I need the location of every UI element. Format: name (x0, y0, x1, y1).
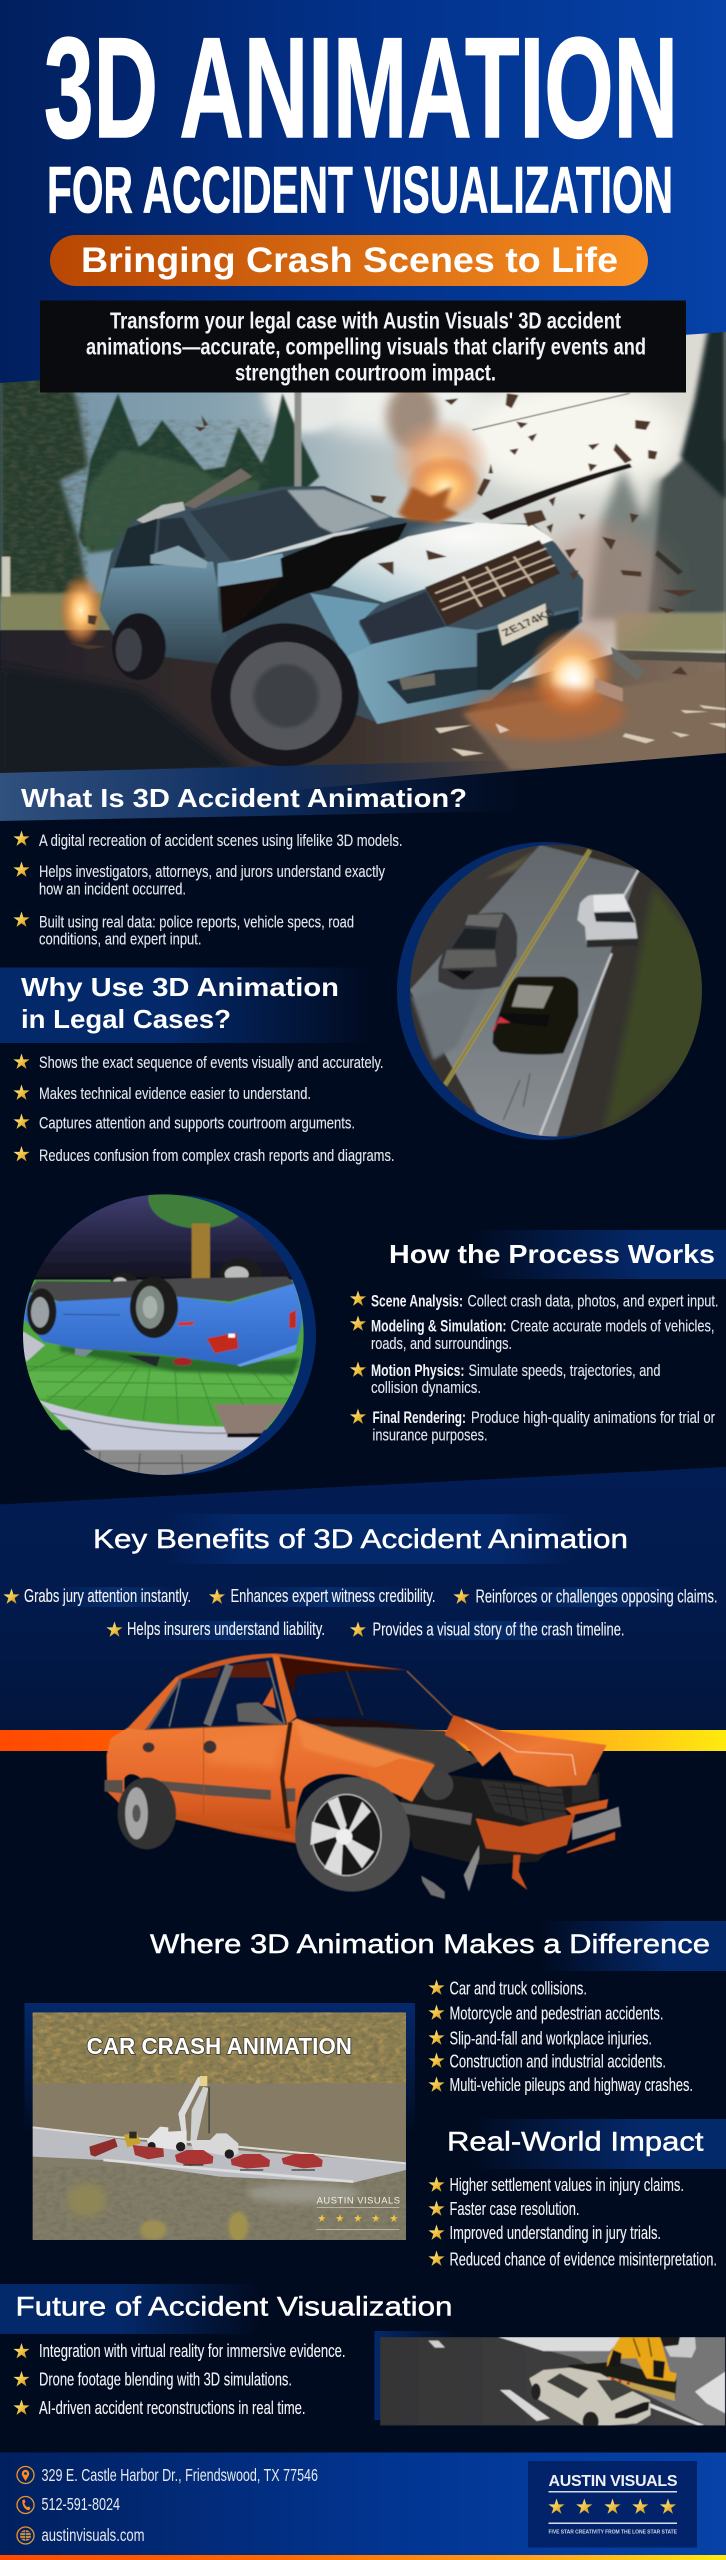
footer panel (0, 2452, 726, 2560)
step: modeling and simulation (350, 1316, 714, 1353)
front wheels (27, 1288, 56, 1335)
3D overturned car circle (10, 1168, 330, 1480)
fallen debris (421, 1876, 445, 1899)
forklift (607, 2337, 677, 2382)
contact: address: 329 E. Castle Harbor Dr., Friendswood, TX 77546 (42, 2465, 318, 2485)
intro text box (40, 300, 686, 392)
bullet: built using real data: conditions, and expert input. (39, 930, 202, 948)
white car (577, 894, 638, 947)
panel: why use 3D animation (0, 968, 394, 1165)
footer gradient strip (0, 2555, 726, 2560)
boom truck (178, 2077, 203, 2133)
headlight (359, 592, 445, 644)
bullet: captures attention: Captures attention and supports courtroom arguments. (39, 1114, 355, 1132)
flatbed (568, 2362, 677, 2400)
road (0, 630, 726, 793)
benefit: insurers (106, 1619, 325, 1639)
step: final rendering: Final Rendering: (372, 1408, 466, 1427)
body (107, 1718, 434, 1843)
wrecked orange car (104, 1653, 621, 1899)
contact: phone (17, 2494, 120, 2514)
bullet: helps investigators: Helps investigators, attorneys, and jurors understand exactly (39, 862, 385, 881)
panel: what is 3D accident animation (0, 760, 520, 948)
hero crash illustration (0, 327, 726, 793)
heading line two: in Legal Cases? (21, 1004, 231, 1034)
black car (493, 977, 578, 1055)
curb (38, 1400, 263, 1462)
heading: real-world impact: Real-World Impact (447, 2126, 704, 2156)
step: motion physics: Simulate speeds, trajectories, and (468, 1361, 660, 1380)
heading: key benefits: Key Benefits of 3D Accident Animation (93, 1524, 628, 1554)
heading: where: Where 3D Animation Makes a Difference (150, 1929, 710, 1959)
fender (310, 593, 380, 657)
contact: website: austinvisuals.com (42, 2525, 144, 2545)
benefit: crash timeline (350, 1620, 624, 1640)
bullet: technical evidence: Makes technical evidence easier to understand. (39, 1084, 311, 1103)
bullet: drone footage (13, 2370, 292, 2390)
step: modeling and simulation: roads, and surroundings. (371, 1334, 512, 1353)
header panel (0, 0, 726, 392)
bullet: virtual reality: Integration with virtual reality for immersive evidence. (39, 2341, 346, 2361)
step: motion physics: Motion Physics: (371, 1361, 464, 1380)
pickup (660, 2337, 696, 2358)
contact: address (17, 2465, 318, 2485)
bullet: built using real data (13, 912, 354, 948)
bullet: helps investigators: how an incident occurred. (39, 880, 186, 898)
scattered debris (69, 393, 697, 675)
bullet: exact sequence: Shows the exact sequence of events visually and accurately. (39, 1053, 384, 1072)
panel: where 3D animation makes a difference (150, 1921, 726, 2095)
underside (28, 1277, 295, 1302)
contact: website (17, 2525, 144, 2545)
benefit: expert witness: Enhances expert witness credibility. (230, 1586, 436, 1606)
pole (294, 347, 301, 487)
panel: how the process works (350, 1230, 726, 1444)
car: ZE174K8 (499, 606, 557, 639)
beam (397, 1802, 472, 1825)
heading: future: Future of Accident Visualization (16, 2292, 452, 2322)
image title: CAR CRASH ANIMATION (87, 2033, 352, 2059)
bullet: drone footage: Drone footage blending with 3D simulations. (39, 2370, 292, 2390)
intro text box: strengthen courtroom impact. (235, 360, 496, 386)
image watermark: AUSTIN VISUALS (317, 2195, 400, 2205)
grille (425, 540, 560, 626)
step: scene analysis (350, 1290, 718, 1310)
car crash animation image (24, 2003, 415, 2242)
back wheels (110, 1272, 138, 1296)
wheels (112, 613, 166, 680)
crumpled hood (445, 1715, 607, 1787)
bullet: slip and fall: Slip-and-fall and workplace injuries. (450, 2028, 652, 2048)
bullet: faster resolution (428, 2199, 580, 2219)
bullet: slip and fall (428, 2028, 652, 2048)
bullet: virtual reality (13, 2341, 345, 2361)
bumper (345, 607, 582, 724)
benefit: crash timeline: Provides a visual story of the crash timeline. (372, 1620, 624, 1640)
logo: Austin Visuals: FIVE STAR CREATIVITY FROM THE LONE STAR STATE (548, 2530, 678, 2536)
heading: what is: What Is 3D Accident Animation? (21, 783, 467, 813)
bullet: car and truck: Car and truck collisions. (450, 1978, 587, 1998)
gray car (438, 913, 517, 990)
tagline pill: Bringing Crash Scenes to Life (81, 241, 618, 280)
simulation image (374, 2331, 725, 2432)
step: motion physics: collision dynamics. (371, 1378, 481, 1397)
front wheel (295, 1777, 410, 1892)
step: scene analysis: Scene Analysis: (371, 1292, 463, 1310)
bumper (476, 1813, 576, 1854)
step: final rendering (350, 1408, 715, 1444)
car (100, 468, 583, 767)
image watermark (317, 2195, 400, 2229)
panel: future of accident visualization (0, 2284, 452, 2418)
step: modeling and simulation: Modeling & Simulation: (371, 1316, 506, 1336)
benefit: expert witness (209, 1586, 436, 1606)
roof (176, 1653, 407, 1678)
rear wheel (118, 1777, 176, 1849)
bullet: car and truck (428, 1978, 587, 1998)
panel: key benefits (3, 1514, 718, 1640)
torn black metal (232, 523, 407, 629)
step: final rendering: insurance purposes. (372, 1426, 488, 1444)
benefit: insurers: Helps insurers understand liability. (127, 1619, 325, 1639)
tagline pill (50, 235, 648, 286)
bullet: built using real data: Built using real data: police reports, vehicle specs, road (39, 912, 354, 932)
bullet: helps investigators (13, 862, 385, 898)
heading: why use: Why Use 3D Animation (21, 972, 339, 1002)
bullet: faster resolution: Faster case resolution. (450, 2199, 580, 2219)
bullet: AI-driven (13, 2398, 305, 2418)
white sedan (529, 2368, 651, 2426)
contact: phone: 512-591-8024 (42, 2494, 120, 2514)
license plate (498, 603, 548, 646)
grass (0, 593, 120, 632)
panel: real-world impact (428, 2119, 726, 2270)
heading: how the process works: How the Process Works (389, 1239, 715, 1269)
benefit: jury attention: Grabs jury attention instantly. (24, 1586, 191, 1606)
overturned and red cars (89, 2138, 118, 2157)
shadow (60, 1345, 300, 1375)
hood (331, 523, 553, 603)
logo: Austin Visuals: AUSTIN VISUALS (548, 2473, 678, 2490)
distant trees right (588, 467, 726, 620)
smoke and fire behind car (387, 383, 438, 450)
body trim (149, 1780, 271, 1800)
bullet: digital recreation: A digital recreation of accident scenes using lifelike 3D models. (39, 831, 402, 850)
benefit: jury attention (3, 1586, 191, 1606)
fire on the hood and front (405, 455, 484, 518)
road (33, 2127, 406, 2183)
brown slab (214, 1404, 287, 1433)
trees left (79, 393, 319, 547)
skid steer (124, 2132, 141, 2147)
orange stripe (0, 1730, 726, 1751)
road photo circle (390, 840, 710, 1140)
black strip debris (482, 463, 632, 520)
bullet: reduces confusion: Reduces confusion from complex crash reports and diagrams. (39, 1146, 394, 1165)
interior and glass frames (180, 1668, 221, 1679)
panel: key benefits background (0, 1467, 726, 1730)
logo: Austin Visuals (528, 2461, 697, 2548)
step: motion physics (350, 1361, 660, 1397)
blue body (23, 1283, 303, 1365)
bullet: AI-driven: AI-driven accident reconstructions in real time. (39, 2398, 306, 2418)
